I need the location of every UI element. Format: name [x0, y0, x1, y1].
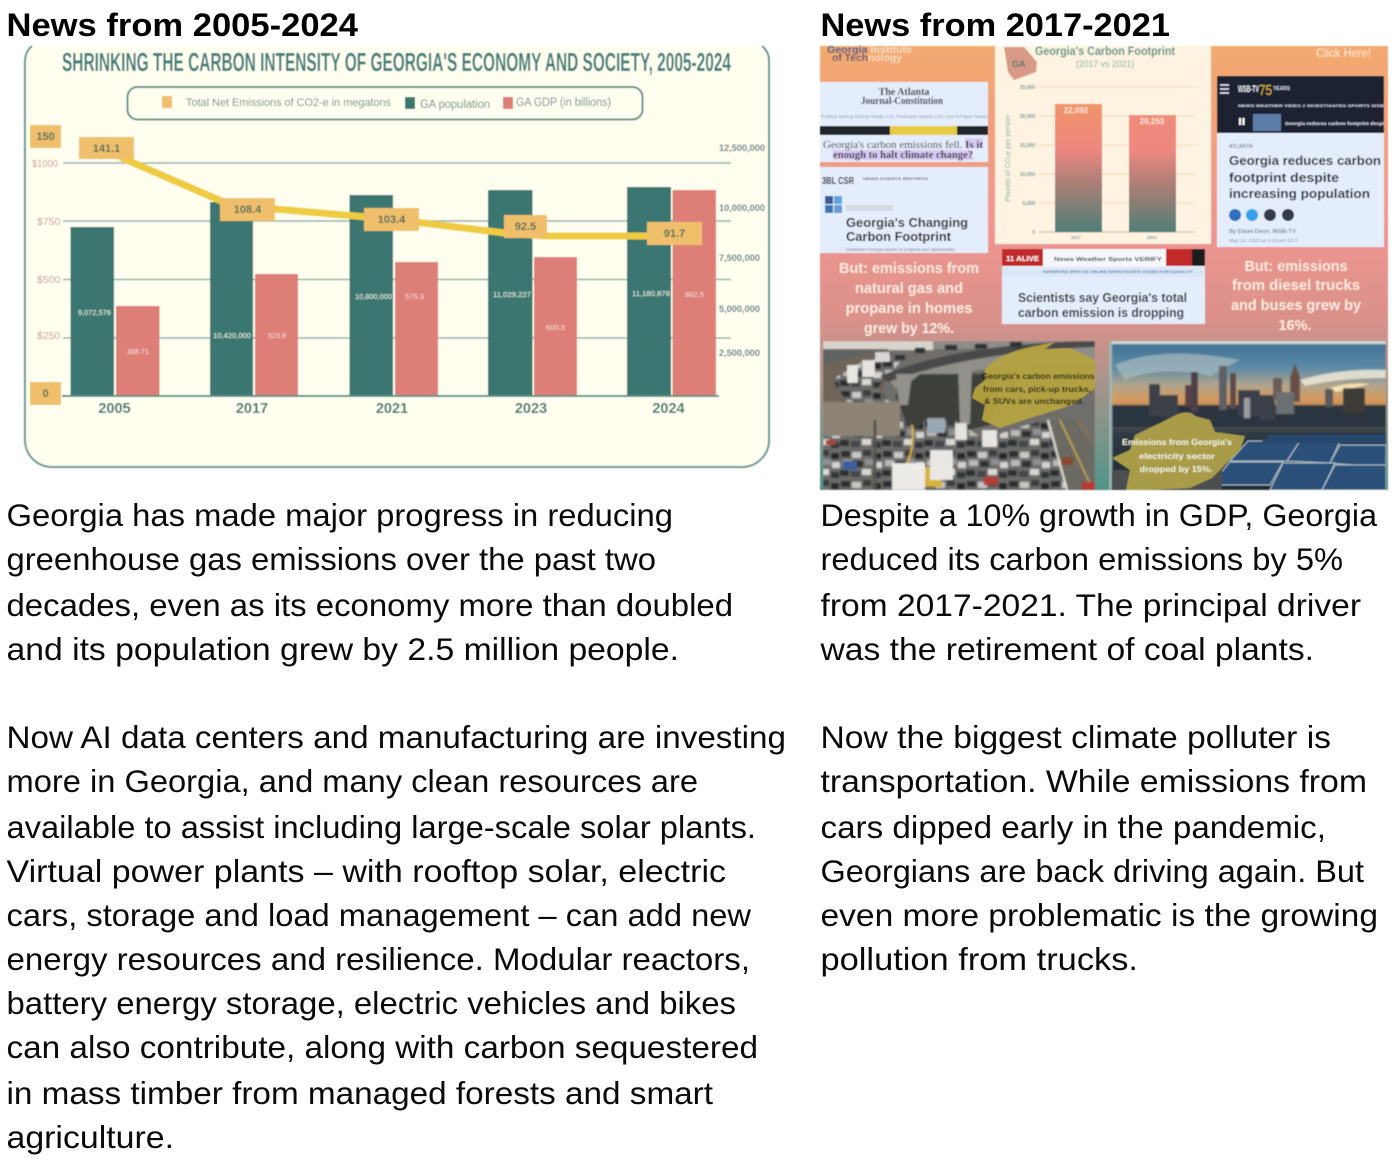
Georgia Tech logo text: of Technology [832, 53, 902, 64]
year labels [98, 401, 685, 417]
bars: 2017: 10,420,000 [213, 331, 251, 340]
text block: left intro: decades, even as its economy more than doubled [6, 587, 733, 623]
Georgia Tech logo text [827, 45, 912, 64]
text block: right intro: Despite a 10% growth in GDP, Georgia [820, 497, 1377, 533]
news card: WSB-TV: YEARS [1273, 86, 1291, 92]
right axis population labels: 7,500,000 [719, 253, 760, 264]
right axis population labels: 10,000,000 [719, 203, 765, 214]
chart card: Georgia's carbon footprint: Pounds of CO₂e per person [1003, 115, 1012, 202]
news card: 11Alive [1002, 249, 1205, 324]
text block: right transportation: even more problematic is the growing [820, 897, 1378, 933]
text block: right transportation: transportation. While emissions from [820, 763, 1367, 799]
news card: WSB-TV: Georgia reduces carbon footprint despi [1285, 121, 1384, 126]
left axis GDP labels: $750 [37, 216, 61, 228]
callout: natural gas: grew by 12%. [864, 321, 954, 337]
news card: WSB-TV [1217, 76, 1384, 247]
news card: WSB-TV: 75 [1259, 82, 1272, 99]
news card: 11Alive: carbon emission is dropping [1018, 306, 1184, 320]
news card: 11Alive: ADVERTISE WITH US ONLINE INVESTIGATES VOICES FOR EQUALITY [1043, 270, 1194, 274]
chart card: Georgia's carbon footprint: Georgia's Carbon Footprint [1035, 46, 1175, 58]
text block: right intro [819, 497, 1377, 667]
photo: Atlanta skyline and solar panels [1109, 341, 1386, 490]
chart card: Georgia's carbon footprint: 10,000 [1020, 172, 1035, 178]
text block: right intro: from 2017-2021. The principal driver [820, 587, 1361, 623]
photo scenery [823, 341, 1095, 490]
yellow callout blob [972, 342, 1100, 428]
bars: 2024 [627, 187, 716, 396]
news card: Atlanta Journal-Constitution: Georgia's carbon emissions fell. Is it [823, 140, 984, 151]
text block: left intro [6, 497, 733, 667]
text block: left AI and clean resources: more in Georgia, and many clean resources are [6, 763, 698, 799]
solar panels [1210, 441, 1386, 490]
bars: 2024: 882.5 [685, 290, 704, 299]
chart panel background [25, 46, 769, 467]
text block: left AI and clean resources: Virtual power plants – with rooftop solar, electric [6, 853, 726, 889]
year labels: 2023 [515, 401, 547, 417]
text block: left AI and clean resources: battery energy storage, electric vehicles and bikes [6, 985, 736, 1021]
callout text: cars: & SUVs are unchanged. [984, 396, 1084, 406]
year labels: 2024 [652, 401, 685, 417]
gridlines [63, 163, 731, 338]
text block: right transportation: Georgians are back driving again. But [820, 853, 1364, 889]
left axis GDP labels: $250 [37, 330, 61, 342]
chart title: SHRINKING THE CARBON INTENSITY OF GEORGIA'S ECONOMY AND SOCIETY, 2005-2024 [62, 49, 731, 77]
news card: WSB-TV: increasing population [1229, 186, 1370, 201]
news card: WSB-TV: footprint despite [1229, 170, 1339, 185]
Georgia Tech logo text: Georgia Institute [827, 45, 912, 56]
chart: carbon intensity 2005-2024 [25, 46, 769, 467]
emissions line [120, 157, 650, 236]
callout text: electricity: Emissions from Georgia's [1122, 437, 1232, 447]
photo: highway traffic [823, 341, 1100, 490]
bars: 2017: 523.8 [268, 331, 286, 340]
news card: 3BL [820, 167, 988, 253]
news card: Atlanta Journal-Constitution: Journal-Constitution [861, 96, 943, 107]
text block: left intro: and its population grew by 2.5 million people. [6, 631, 679, 667]
text block: left AI and clean resources: Now AI data centers and manufacturing are investing [6, 719, 786, 755]
legend: GA GDP (in billions) [516, 97, 611, 109]
photo scenery [1109, 341, 1386, 490]
legend: GA population [420, 99, 490, 111]
collage gradient background [820, 46, 1388, 490]
callout text: cars: from cars, pick-up trucks, [983, 384, 1091, 394]
callout: diesel trucks [1231, 259, 1361, 334]
callout text: electricity: dropped by 15%. [1140, 464, 1212, 474]
news card: 3BL: 3BL CSR [822, 176, 855, 187]
click here link: Click Here! [1316, 48, 1371, 60]
text block: left AI and clean resources: energy resources and resilience. Modular reactors, [6, 941, 750, 977]
news card: 3BL: Carbon Footprint [846, 229, 952, 244]
emission value boxes: 150 [36, 131, 55, 143]
right axis population labels: 5,000,000 [719, 304, 760, 315]
chart card: Georgia's carbon footprint: 5,000 [1022, 201, 1035, 207]
callout text: cars: Georgia's carbon emissions [982, 371, 1095, 381]
legend: Total Net Emissions of CO2-e in megatons [186, 97, 391, 109]
year labels: 2017 [236, 401, 268, 417]
text block: right transportation: pollution from trucks. [820, 941, 1138, 977]
right axis population labels [719, 143, 765, 359]
news card: WSB-TV: Georgia reduces carbon [1229, 153, 1381, 168]
text block: right transportation: cars dipped early in the pandemic, [820, 809, 1326, 845]
left axis GDP labels: $500 [37, 274, 61, 286]
news card: Atlanta Journal-Constitution [820, 82, 988, 162]
right axis population labels: 12,500,000 [719, 143, 765, 154]
left axis GDP labels [32, 158, 61, 342]
callout text: electricity [1122, 437, 1232, 474]
news card: WSB-TV: May 24, 2023 at 5:59 pm EDT [1229, 238, 1298, 243]
year labels: 2005 [98, 401, 131, 417]
bars: 2021: 10,800,000 [355, 292, 392, 301]
legend [128, 87, 642, 120]
callout: diesel trucks: But: emissions [1244, 259, 1348, 275]
bars: 2005: 388.71 [127, 347, 149, 356]
chart card: Georgia's carbon footprint: 2017 [1071, 235, 1082, 240]
emission value boxes: 108.4 [234, 204, 262, 216]
callout: natural gas: natural gas and [855, 281, 963, 297]
text block: left AI and clean resources: available to assist including large-scale solar plants. [6, 809, 756, 845]
baseline axis [62, 395, 719, 397]
news card: 11Alive: Scientists say Georgia's total [1018, 291, 1187, 305]
news card: WSB-TV: By Eboni Deon, WSB-TV [1229, 229, 1296, 235]
callout: diesel trucks: and buses grew by [1231, 298, 1361, 314]
news card: 3BL: NEWS EVENTS REPORTS [863, 176, 928, 181]
bars: 2005 [70, 227, 160, 396]
chart card: Georgia's carbon footprint: 2021 [1147, 235, 1158, 240]
chart card: Georgia's carbon footprint: 22,092 [1064, 106, 1089, 115]
chart card: Georgia's carbon footprint: GA [1012, 59, 1026, 69]
emission value boxes: 0 [42, 388, 49, 400]
news card: 11Alive: 11 ALIVE [1006, 254, 1039, 263]
text block: left intro: greenhouse gas emissions over the past two [6, 541, 656, 577]
text block: left AI and clean resources: can also contribute, along with carbon sequestered [6, 1029, 758, 1065]
chart card: Georgia's carbon footprint: 25,000 [1020, 85, 1035, 91]
chart card: Georgia's carbon footprint: 0 [1032, 230, 1035, 236]
news card: 3BL: Georgia's Changing [846, 215, 968, 230]
left axis GDP labels: $1000 [32, 158, 58, 170]
bars: 2023 [488, 190, 577, 396]
bars: 2021: 575.3 [405, 292, 424, 301]
emission value boxes [30, 125, 702, 405]
vehicles [826, 342, 1095, 490]
callout: natural gas: propane in homes [846, 301, 972, 317]
news card: Atlanta Journal-Constitution: Politics Spring Dining Guide AJC Podcasts Sports AJC Live EPaper News [821, 114, 988, 119]
emission value boxes: 91.7 [664, 228, 685, 240]
news card: 11Alive: News Weather Sports VERIFY [1054, 257, 1163, 263]
chart card: Georgia's carbon footprint: 20,253 [1140, 117, 1165, 126]
chart card: Georgia's carbon footprint: 15,000 [1020, 143, 1035, 149]
news card: 3BL: Drawdown Georgia reports on progress and opportunities [846, 247, 956, 252]
text block: left AI and clean resources: agriculture. [6, 1119, 174, 1155]
callout: natural gas [839, 261, 979, 337]
bars: 2024: 11,180,878 [632, 289, 670, 298]
emission value boxes: 141.1 [93, 143, 120, 155]
heading: left column: News from 2005-2024 [6, 7, 358, 43]
emission value boxes: 92.5 [515, 221, 536, 233]
news card: Atlanta Journal-Constitution: enough to halt climate change? [833, 150, 973, 161]
news card: WSB-TV: ATLANTA [1229, 144, 1253, 150]
chart card: Georgia's carbon footprint: 20,000 [1020, 114, 1035, 120]
text block: left AI and clean resources: in mass timber from managed forests and smart [6, 1075, 713, 1111]
callout text: cars [982, 371, 1095, 406]
callout: natural gas: But: emissions from [839, 261, 979, 277]
olive callout blob [1112, 412, 1245, 490]
text block: right transportation: Now the biggest climate polluter is [820, 719, 1331, 755]
callout: diesel trucks: from diesel trucks [1232, 278, 1360, 294]
right axis population labels: 2,500,000 [719, 348, 760, 359]
text block: right transportation [820, 719, 1378, 977]
icon: Georgia state badge [1004, 47, 1037, 80]
text block: right intro: reduced its carbon emissions by 5% [820, 541, 1343, 577]
news card: WSB-TV: WSB-TV [1238, 84, 1259, 94]
text block: left AI and clean resources: cars, storage and load management – can add new [6, 897, 751, 933]
emission value boxes: 103.4 [378, 214, 406, 226]
bars: 2021 [350, 195, 438, 396]
news collage panel [820, 45, 1388, 490]
chart card: Georgia's carbon footprint [995, 46, 1211, 244]
chart card: Georgia's carbon footprint: (2017 vs 2021) [1076, 59, 1134, 69]
heading: right column: News from 2017-2021 [820, 7, 1170, 43]
bars: 2017 [210, 202, 298, 396]
news card: Atlanta Journal-Constitution: The Atlanta [879, 87, 929, 98]
callout text: electricity: electricity sector [1139, 451, 1216, 461]
bars: 2005: 9,072,576 [78, 308, 111, 317]
text block: right intro: was the retirement of coal plants. [819, 631, 1314, 667]
text block: left AI and clean resources [6, 719, 786, 1155]
bars: 2023: 600.3 [546, 323, 565, 332]
bars: 2023: 11,029,227 [493, 290, 531, 299]
news card: WSB-TV: NEWS WEATHER VIDEO 2 INVESTIGATES SPORTS WSB [1238, 103, 1384, 108]
year labels: 2021 [376, 401, 408, 417]
text block: left intro: Georgia has made major progress in reducing [6, 497, 673, 533]
callout: diesel trucks: 16%. [1278, 318, 1312, 334]
